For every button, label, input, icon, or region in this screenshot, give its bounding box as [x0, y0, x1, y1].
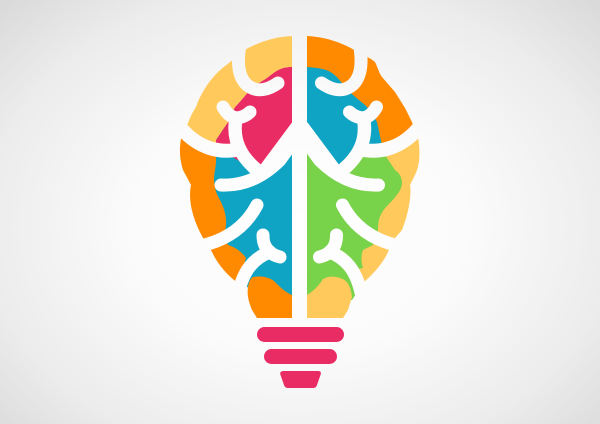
bulb screw base	[257, 327, 344, 388]
right bottom yellow lobe	[307, 277, 352, 318]
infographic: brain light bulb	[180, 36, 420, 388]
left teal lobe	[214, 126, 292, 295]
left bottom orange lobe	[248, 276, 292, 318]
right teal lobe	[307, 67, 382, 164]
left pink lobe	[216, 67, 292, 172]
right middle yellow lobe	[358, 132, 419, 283]
base tip	[280, 371, 321, 388]
left yellow lobe	[187, 36, 292, 142]
right orange lobe	[307, 36, 416, 150]
left middle orange lobe	[180, 130, 246, 283]
right green lobe	[307, 154, 402, 300]
left brain hemisphere	[180, 36, 292, 318]
base bar 2	[264, 349, 337, 364]
base bar 1	[257, 327, 344, 342]
right brain hemisphere	[307, 36, 419, 318]
